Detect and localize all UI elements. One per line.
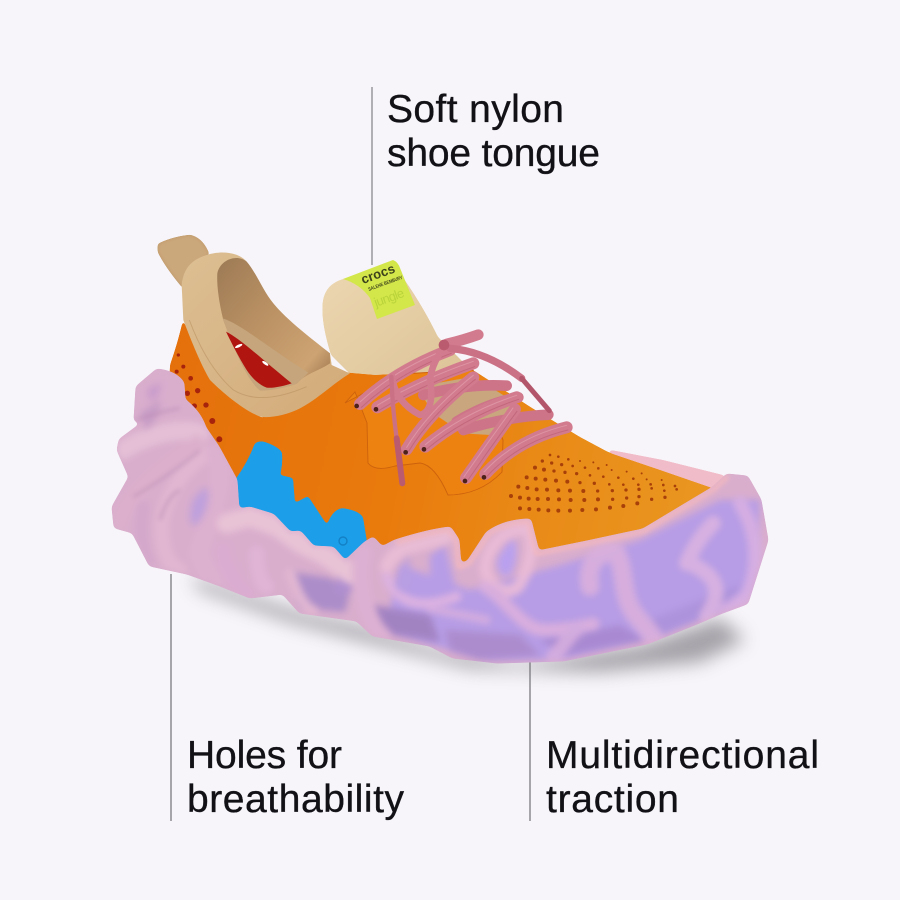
lilac toe body (385, 500, 760, 660)
callout text: multidirectional traction: traction (546, 778, 679, 821)
callout text: multidirectional traction (546, 734, 819, 821)
front lace strips (360, 350, 567, 478)
callout line: holes (170, 574, 172, 821)
lace knot (439, 340, 449, 350)
pink ridges: heel and midfoot (120, 431, 457, 637)
blue piece rivet (339, 537, 347, 545)
lace shadow stripes (361, 353, 568, 480)
long lace end (450, 348, 522, 378)
lilac hollows (140, 383, 516, 592)
hanging lace loop (392, 348, 444, 415)
padded collar (182, 253, 350, 417)
bow (447, 335, 478, 344)
tongue label: jungle (371, 285, 406, 310)
tan gap under laces (417, 377, 517, 435)
sole base (113, 370, 767, 662)
shoe lining (217, 258, 330, 390)
tongue label: crocs (359, 261, 397, 287)
eyelets (354, 404, 486, 483)
callout text: holes for breathability: Holes for (187, 734, 342, 777)
callout text: multidirectional traction: Multidirectional (546, 734, 819, 777)
blue heel piece (235, 441, 367, 566)
callout line: traction (529, 658, 531, 821)
violet shading at the base (294, 570, 699, 662)
ground shadow (190, 576, 745, 672)
pink ridges: toe (430, 503, 755, 657)
callout text: holes for breathability (187, 734, 404, 821)
orange upper (165, 320, 720, 600)
callout text: soft nylon shoe tongue: Soft nylon (387, 88, 564, 131)
tongue label: SALEHE BEMBURY (368, 275, 404, 293)
red insole (226, 332, 292, 388)
callout text: soft nylon shoe tongue: shoe tongue (387, 132, 600, 175)
lace highlight stripes (360, 348, 567, 477)
heel pull tab (158, 235, 209, 288)
toe perforations (509, 454, 678, 513)
callout line: tongue (371, 87, 373, 265)
tongue label (343, 260, 415, 319)
collar and shoe opening (182, 253, 350, 417)
shoe tongue (322, 268, 473, 390)
collar stitch line (189, 320, 307, 398)
peach sole rim (395, 475, 727, 565)
sole (113, 370, 767, 662)
fabric rim of the insole (223, 318, 308, 391)
callout text: holes for breathability: breathability (187, 778, 404, 821)
heel perforations (175, 353, 222, 470)
toe bumper (607, 450, 732, 489)
creases between heel lobes (133, 408, 200, 520)
back lace strips (423, 385, 548, 430)
callout text: soft nylon shoe tongue (387, 88, 600, 175)
shoe illustration (113, 235, 767, 672)
lace panel overlay (345, 370, 503, 495)
laces (354, 335, 568, 483)
